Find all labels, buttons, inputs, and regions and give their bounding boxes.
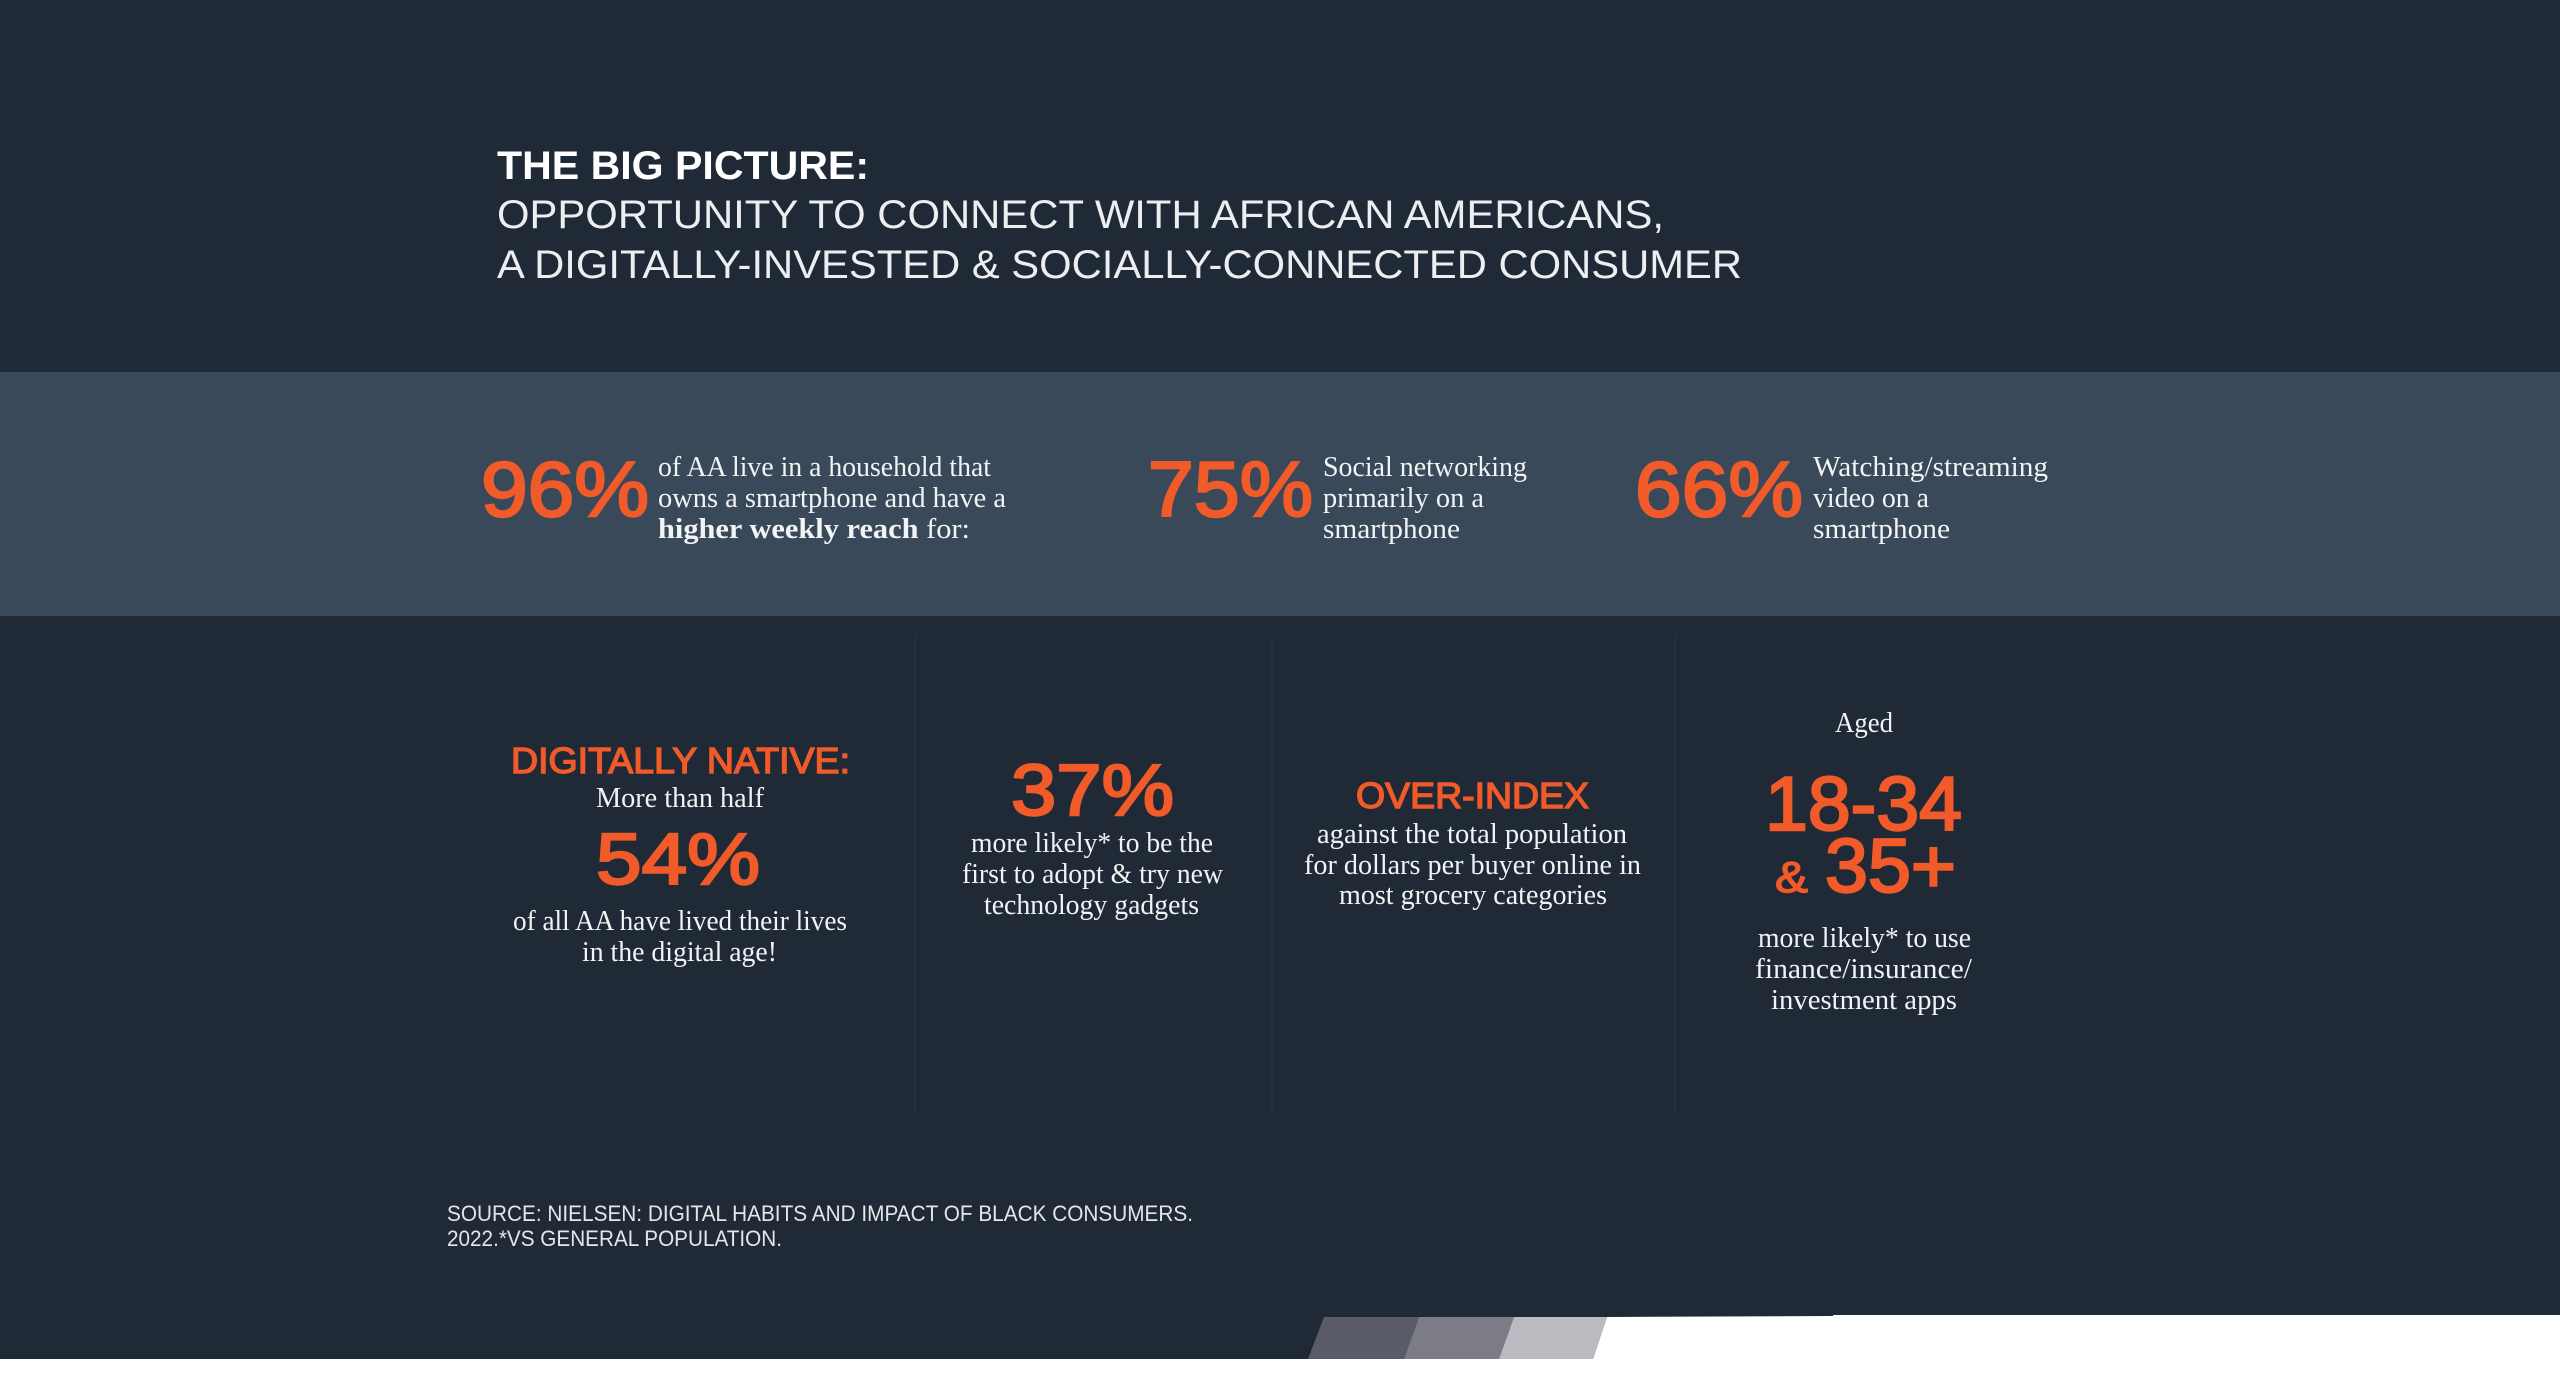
- stat: 96% smartphone household: owns a smartphone and have a: [658, 483, 1007, 514]
- footer chevron stripes: [1308, 1317, 1607, 1359]
- column: 37% early adopters: [962, 751, 1224, 921]
- column: digitally native: More than half: [596, 783, 765, 814]
- column: aged 18-34 and 35+: investment apps: [1771, 985, 1957, 1016]
- source note: [447, 1201, 1193, 1251]
- stat: 75% social networking: 75%: [1148, 445, 1313, 533]
- column: digitally native: in the digital age!: [582, 937, 777, 968]
- column: digitally native: DIGITALLY NATIVE:: [511, 740, 850, 781]
- column: over-index: OVER-INDEX: [1356, 775, 1589, 816]
- column: aged 18-34 and 35+: finance/insurance/: [1755, 954, 1972, 985]
- title: A DIGITALLY-INVESTED & SOCIALLY-CONNECTED CONSUMER: [497, 243, 1742, 287]
- column: digitally native: of all AA have lived their lives: [513, 906, 847, 937]
- stat: 75% social networking: Social networking: [1323, 452, 1527, 483]
- column: aged 18-34 and 35+: more likely* to use: [1758, 923, 1971, 954]
- stat: 75% social networking: primarily on a: [1323, 483, 1485, 514]
- title: [497, 144, 1742, 287]
- column: over-index: most grocery categories: [1339, 880, 1607, 911]
- stat: 96% smartphone household: higher weekly reach for:: [658, 514, 970, 545]
- source note: SOURCE: NIELSEN: DIGITAL HABITS AND IMPACT OF BLACK CONSUMERS.: [447, 1201, 1193, 1226]
- stat band background: [0, 372, 2560, 616]
- stat: 66% streaming video: [1635, 445, 2048, 545]
- stat: 66% streaming video: video on a: [1813, 483, 1930, 514]
- stat: 96% smartphone household: [481, 445, 1007, 545]
- source note: 2022.*VS GENERAL POPULATION.: [447, 1226, 782, 1251]
- title: OPPORTUNITY TO CONNECT WITH AFRICAN AMERICANS,: [497, 193, 1664, 237]
- stat: 96% smartphone household: of AA live in a household that: [658, 452, 991, 483]
- stat: 66% streaming video: Watching/streaming: [1813, 452, 2048, 483]
- column: over-index: [1304, 775, 1641, 911]
- column: digitally native: 54%: [596, 820, 760, 900]
- stat: 75% social networking: smartphone: [1323, 514, 1460, 545]
- column: aged 18-34 and 35+: 35+: [1825, 824, 1956, 909]
- column: 37% early adopters: more likely* to be the: [971, 828, 1213, 859]
- stat: 66% streaming video: smartphone: [1813, 514, 1950, 545]
- stat: 96% smartphone household: 96%: [481, 445, 649, 533]
- column: aged 18-34 and 35+: [1755, 708, 1972, 1016]
- title: THE BIG PICTURE:: [497, 144, 869, 188]
- column: aged 18-34 and 35+: Aged: [1835, 708, 1893, 739]
- stat: 75% social networking: [1148, 445, 1527, 545]
- column: aged 18-34 and 35+: &: [1775, 853, 1808, 902]
- column: 37% early adopters: first to adopt & try new: [962, 859, 1224, 890]
- column: aged 18-34 and 35+: 18-34: [1765, 762, 1962, 847]
- column: over-index: for dollars per buyer online in: [1304, 850, 1641, 881]
- column: 37% early adopters: technology gadgets: [984, 890, 1199, 921]
- stat: 66% streaming video: 66%: [1635, 445, 1803, 533]
- column: 37% early adopters: 37%: [1011, 751, 1174, 831]
- column: over-index: against the total population: [1317, 819, 1627, 850]
- column: digitally native: [511, 740, 850, 968]
